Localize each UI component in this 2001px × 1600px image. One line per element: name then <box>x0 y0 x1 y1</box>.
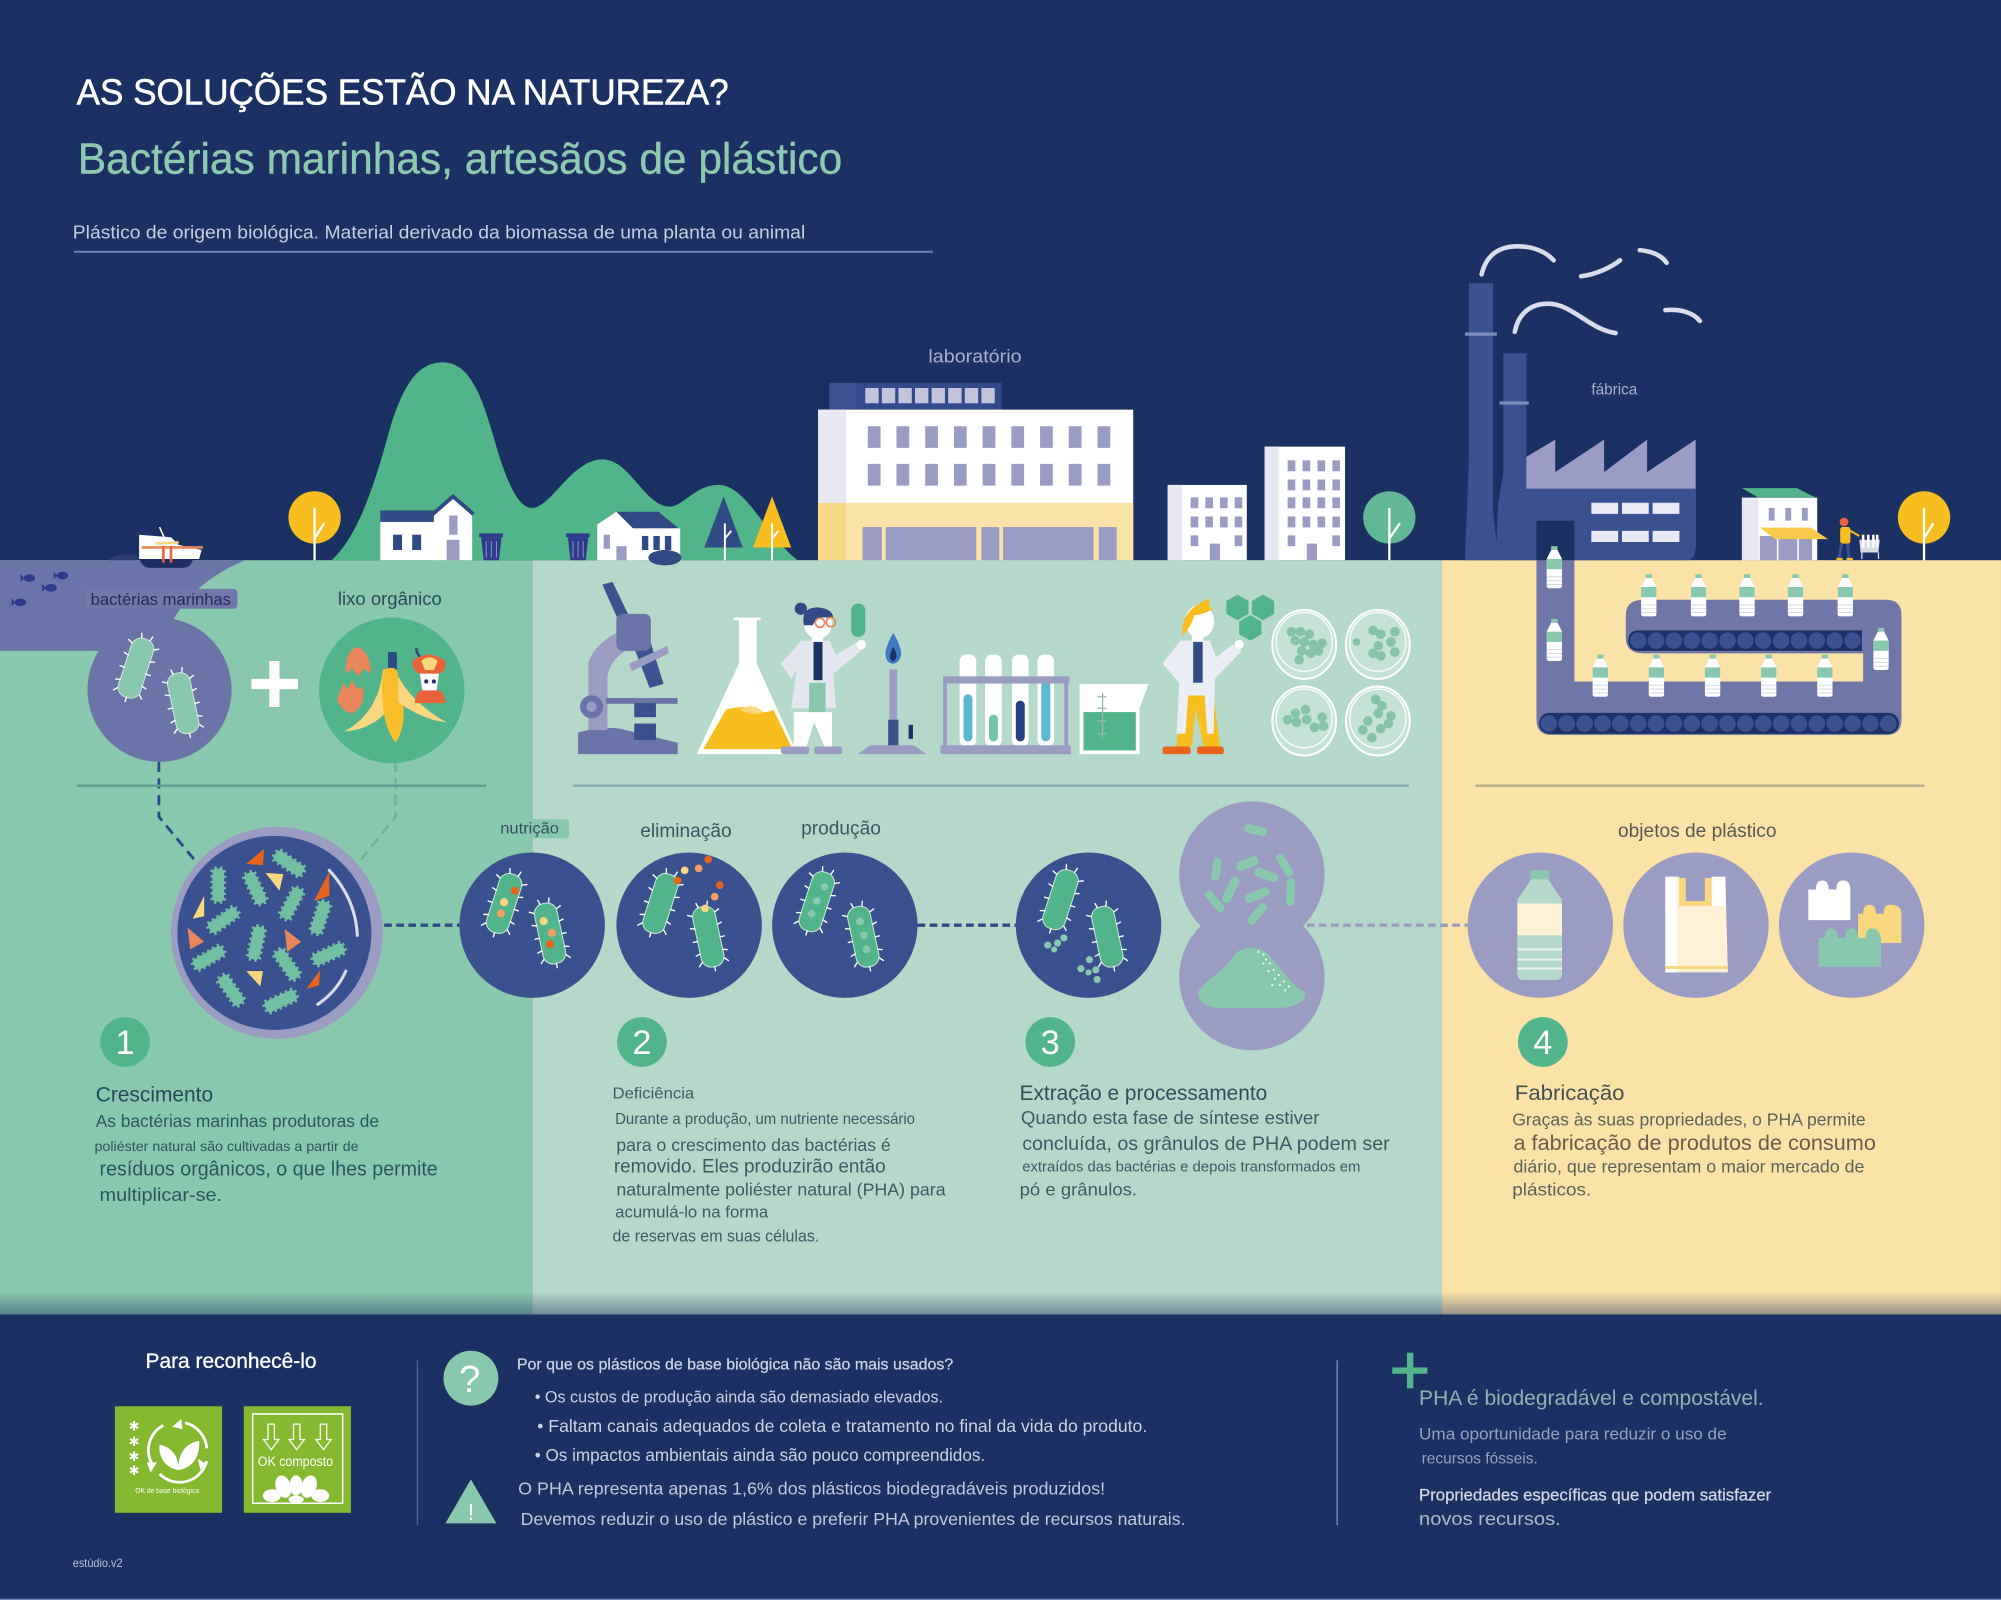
warning text <box>518 1478 1186 1529</box>
panel: growth <box>0 560 532 1314</box>
step 2 text <box>613 1086 946 1246</box>
step 3 number: 3 <box>1041 1024 1060 1062</box>
label: bactérias marinhas: bactérias marinhas <box>91 590 231 609</box>
why not used text: • Os custos de produção ainda são demasiado elevados. <box>535 1387 943 1406</box>
icon: question mark: ? <box>459 1358 480 1401</box>
icon: microscope <box>578 582 678 754</box>
step 2 text: para o crescimento das bactérias é <box>616 1135 891 1155</box>
icon: fish <box>12 572 68 606</box>
step 1 text: Crescimento <box>96 1083 213 1106</box>
icon: house 2 <box>597 512 681 565</box>
step 4 text: plásticos. <box>1512 1180 1591 1200</box>
shop <box>1742 488 1828 560</box>
connector: process line 3 <box>1307 924 1468 926</box>
circle: extraction <box>1016 852 1161 998</box>
icon: woman scientist <box>781 603 866 754</box>
icon: test tube rack <box>941 655 1071 754</box>
icon: petri dishes <box>1272 610 1410 755</box>
step 4 text: Graças às suas propriedades, o PHA permite <box>1512 1110 1866 1130</box>
circle: plastic bag <box>1623 852 1769 998</box>
subtitle: Bactérias marinhas, artesãos de plástico <box>78 136 842 184</box>
step 2 number <box>617 1017 667 1067</box>
benefits text: Uma oportunidade para reduzir o uso de <box>1419 1424 1727 1443</box>
icon: man scientist <box>1163 595 1274 754</box>
step 1 number: 1 <box>116 1024 135 1062</box>
step 2 text: Durante a produção, um nutriente necessário <box>615 1111 915 1128</box>
connector: bacteria to dish <box>159 762 198 864</box>
icon: shopper with cart <box>1836 518 1880 559</box>
step 1 text: multiplicar-se. <box>100 1184 222 1205</box>
step 3 text: extraídos das bactérias e depois transformados em <box>1022 1159 1360 1175</box>
badge: OK composto: OK composto <box>258 1454 333 1469</box>
badge: OK de base biológica <box>115 1406 222 1513</box>
label: lixo orgânico: lixo orgânico <box>338 588 442 609</box>
warning text: Devemos reduzir o uso de plástico e preferir PHA provenientes de recursos naturais. <box>521 1509 1186 1529</box>
icon: organic waste circle <box>319 618 465 763</box>
step 2 text: naturalmente poliéster natural (PHA) para <box>616 1180 946 1200</box>
icon: yellow tree <box>288 491 341 560</box>
label: laboratório: laboratório <box>928 345 1022 366</box>
definition text: Plástico de origem biológica. Material derivado da biomassa de uma planta ou animal <box>73 222 805 243</box>
label: eliminação: eliminação <box>640 821 732 842</box>
step 2 text: Deficiência <box>613 1086 694 1103</box>
benefits text <box>1419 1387 1772 1529</box>
benefits text: PHA é biodegradável e compostável. <box>1419 1387 1764 1410</box>
step 3 text: Quando esta fase de síntese estiver <box>1021 1107 1320 1128</box>
step 1 text <box>94 1083 438 1205</box>
why not used text: Por que os plásticos de base biológica não são mais usados? <box>517 1356 953 1373</box>
step 1 text: resíduos orgânicos, o que lhes permite <box>100 1158 438 1180</box>
petri dish with bacteria <box>171 827 383 1039</box>
heading: Para reconhecê-lo: Para reconhecê-lo <box>145 1350 316 1373</box>
why not used text <box>517 1356 1147 1465</box>
step 2 text: de reservas em suas células. <box>613 1227 819 1246</box>
panel bottom shading <box>0 1291 2001 1314</box>
icon: flask with yellow liquid <box>697 618 798 754</box>
icon: bunsen burner <box>858 633 926 754</box>
step 4 text: a fabricação de produtos de consumo <box>1514 1132 1876 1155</box>
icon: yellow tree right <box>1898 491 1950 560</box>
icon: green tree <box>1363 491 1415 560</box>
icon: boat <box>108 527 203 568</box>
icon: trash can 2 <box>566 533 590 560</box>
icon: trash can 1 <box>479 533 503 560</box>
icon: house 1 <box>380 496 473 560</box>
icon: warning triangle <box>445 1479 496 1525</box>
label: nutrição <box>491 819 569 838</box>
connector: process line 2 <box>918 924 1017 926</box>
badge: OK composto <box>244 1406 351 1513</box>
label: produção: produção <box>801 819 881 840</box>
icon: warning triangle: ! <box>468 1499 474 1525</box>
step 2 number: 2 <box>632 1024 651 1062</box>
step 1 text: poliéster natural são cultivadas a partir de <box>94 1138 359 1154</box>
icon: marine bacteria circle <box>87 618 232 762</box>
benefits text: Propriedades específicas que podem satisfazer <box>1419 1486 1772 1505</box>
why not used text: • Faltam canais adequados de coleta e tratamento no final da vida do produto. <box>537 1416 1147 1436</box>
conveyor system <box>1536 521 1901 735</box>
panel: laboratory <box>532 560 1442 1314</box>
label: fábrica: fábrica <box>1591 381 1638 398</box>
factory <box>1465 283 1696 560</box>
circle: elimination <box>616 852 762 998</box>
icon: question mark <box>443 1351 498 1406</box>
icon: yellow pine tree <box>753 496 791 560</box>
step 4 text: diário, que representam o maior mercado de <box>1514 1157 1864 1177</box>
title: AS SOLUÇÕES ESTÃO NA NATUREZA? <box>77 72 729 113</box>
circle: bottle <box>1468 852 1613 998</box>
benefits text: recursos fósseis. <box>1422 1451 1538 1468</box>
warning text: O PHA representa apenas 1,6% dos plásticos biodegradáveis produzidos! <box>518 1478 1105 1498</box>
hills <box>332 362 798 560</box>
circles: PHA granules and powder <box>1179 801 1325 1050</box>
benefits text: novos recursos. <box>1419 1508 1561 1529</box>
badge: OK de base biológica: OK de base biológica <box>135 1486 200 1495</box>
panel: manufacturing <box>1442 560 2001 1314</box>
badge: OK de base biológica: ✱ <box>129 1419 140 1434</box>
icon: plus sign <box>1392 1353 1427 1388</box>
circle: plastic blocks <box>1779 852 1924 998</box>
credit: estúdio.v2 <box>73 1556 123 1570</box>
icon: plus <box>251 661 298 707</box>
step 3 text <box>1020 1082 1390 1200</box>
step 1 text: As bactérias marinhas produtoras de <box>96 1111 379 1131</box>
step 4 number: 4 <box>1533 1024 1552 1062</box>
step 4 text <box>1512 1080 1876 1200</box>
icon: beaker <box>1080 684 1149 754</box>
label: objetos de plástico: objetos de plástico <box>1618 821 1776 842</box>
factory smoke <box>1482 246 1700 333</box>
step 3 text: pó e grânulos. <box>1020 1180 1137 1200</box>
step 4 number <box>1518 1017 1568 1067</box>
step 3 number <box>1025 1017 1075 1067</box>
step 2 text: acumulá-lo na forma <box>615 1202 769 1221</box>
icon: navy pine tree <box>704 496 743 560</box>
step 3 text: concluída, os grânulos de PHA podem ser <box>1022 1133 1390 1155</box>
step 2 text: removido. Eles produzirão então <box>614 1157 886 1178</box>
badge: OK de base biológica: ✱ <box>129 1463 140 1478</box>
label: nutrição: nutrição <box>500 820 559 837</box>
badge: OK de base biológica: ✱ <box>129 1449 140 1464</box>
badge: OK de base biológica: ✱ <box>129 1434 140 1449</box>
laboratory building <box>818 383 1133 560</box>
why not used text: • Os impactos ambientais ainda são pouco compreendidos. <box>535 1445 985 1465</box>
tall building <box>1265 447 1345 560</box>
small building <box>1168 485 1247 560</box>
connector: waste to dish <box>359 762 396 863</box>
circle: production <box>772 852 918 998</box>
sea <box>0 560 245 651</box>
step 3 text: Extração e processamento <box>1020 1082 1267 1105</box>
circle: nutrition <box>459 852 605 998</box>
connector: process line 1 <box>384 924 459 926</box>
step 4 text: Fabricação <box>1515 1080 1625 1105</box>
step 1 number <box>100 1017 150 1067</box>
